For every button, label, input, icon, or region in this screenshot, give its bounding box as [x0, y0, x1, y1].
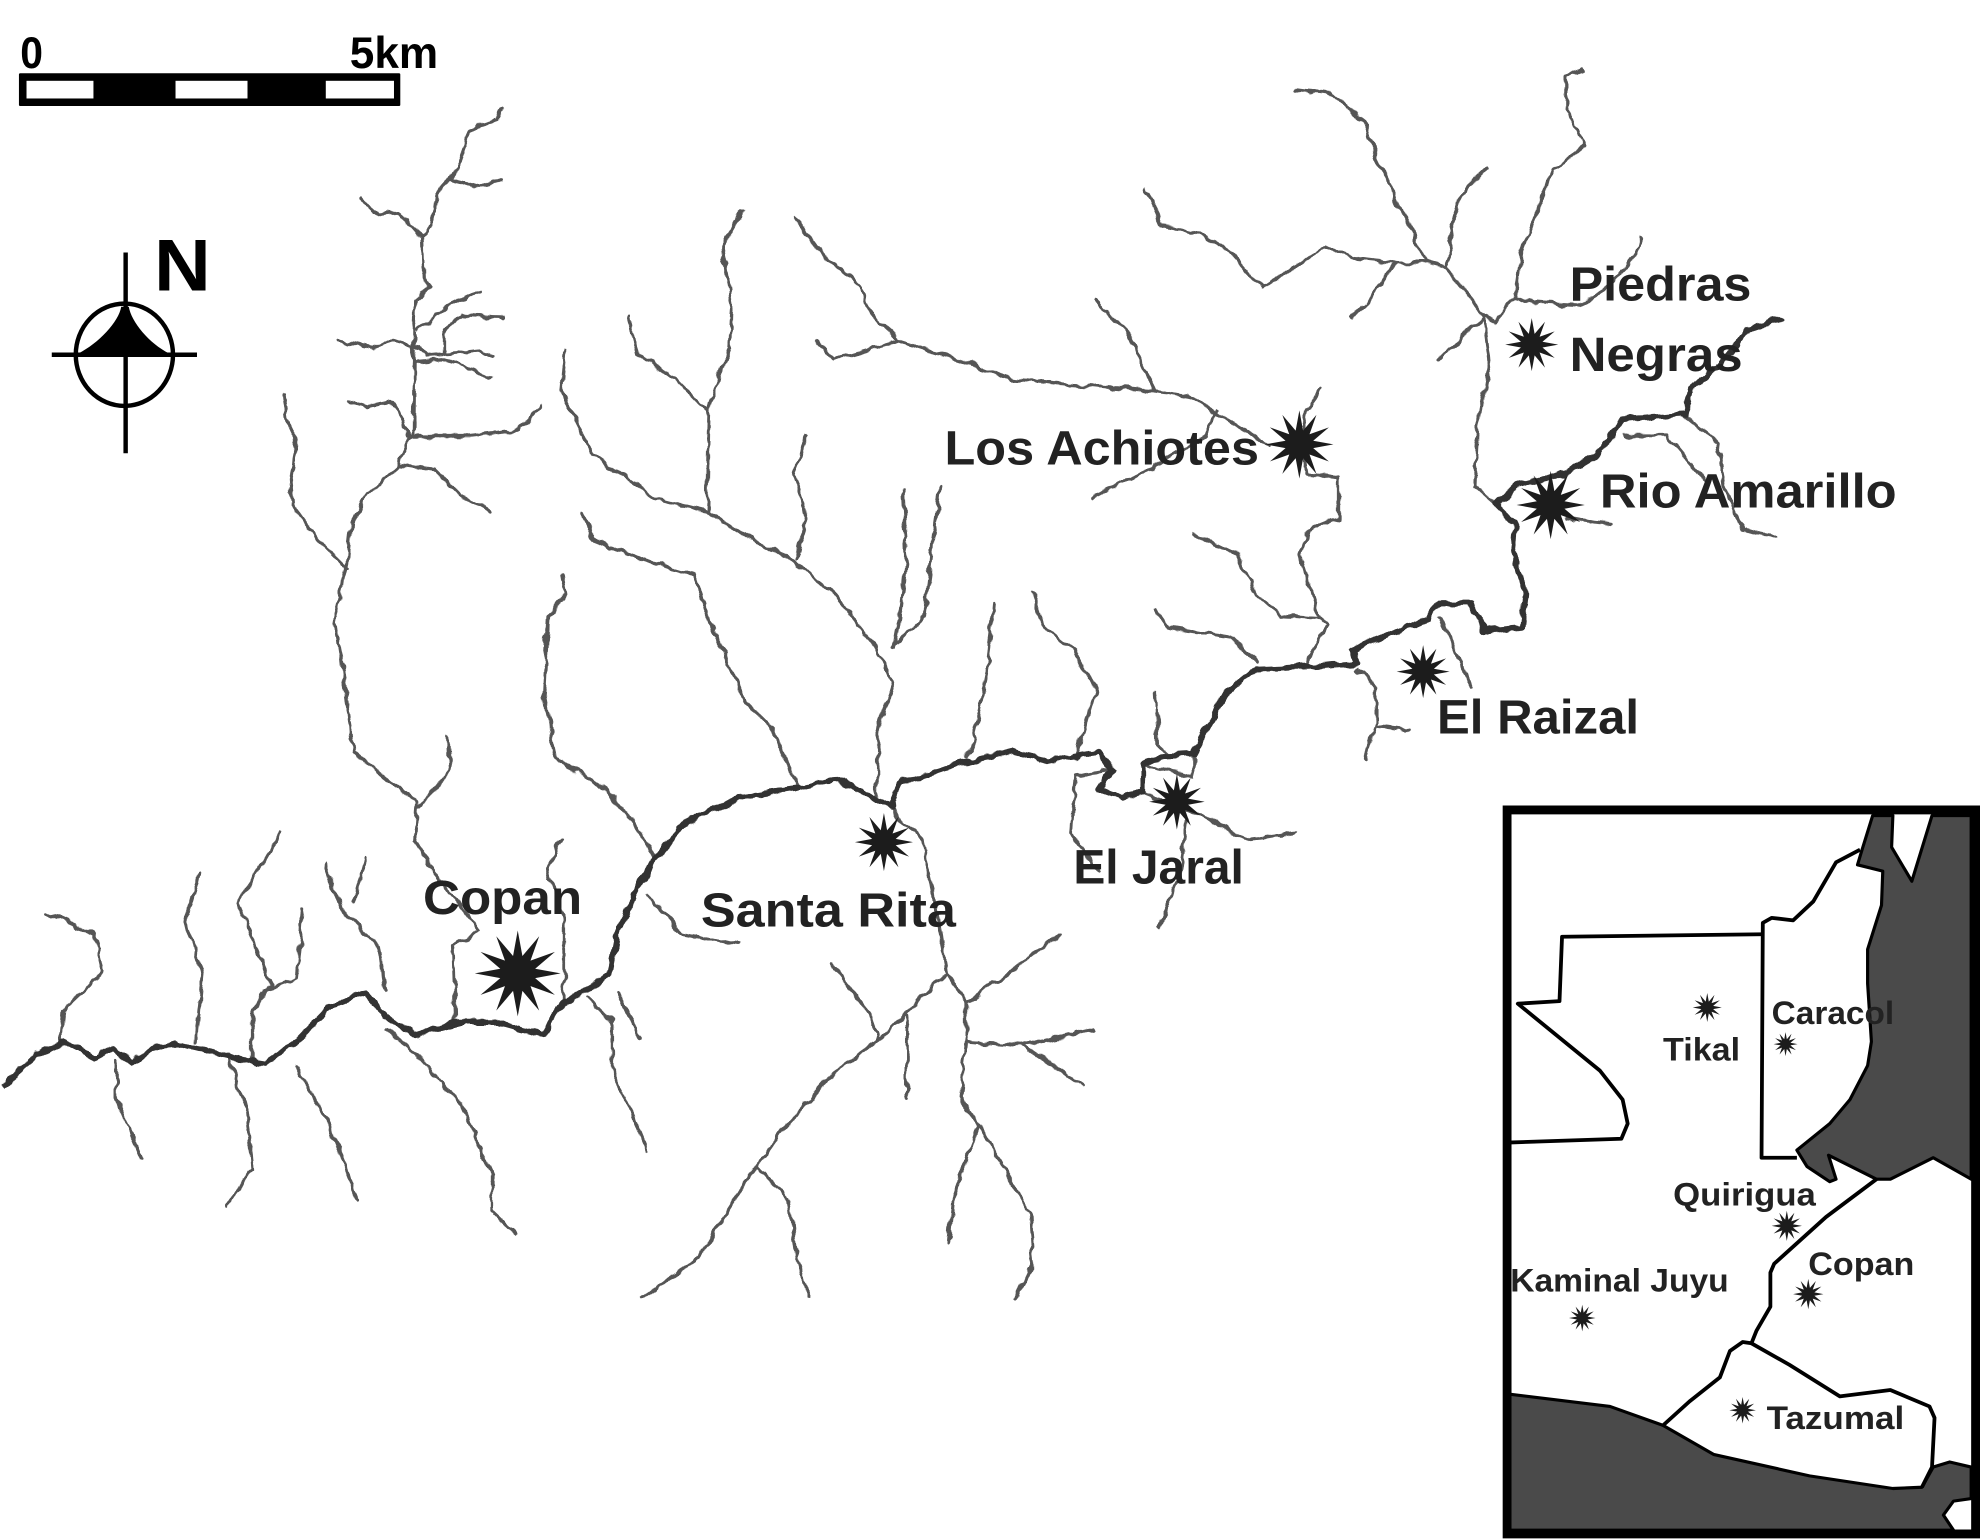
sea: Pacific: [1506, 1394, 1971, 1530]
site: Copan: Copan: [423, 872, 582, 925]
site: Rio Amarillo: Rio Amarillo: [1600, 466, 1897, 519]
inset frame: [1507, 810, 1976, 1534]
north arrow: [52, 224, 211, 453]
site: El Jaral: El Jaral: [1073, 842, 1244, 895]
inset site: Copan: [1793, 1245, 1914, 1309]
site: Piedras Negras: Piedras: [1570, 258, 1751, 311]
site: El Jaral: [1073, 774, 1244, 895]
scale bar: 5km: [350, 29, 438, 78]
site: El Raizal: El Raizal: [1437, 692, 1639, 745]
site: El Raizal: [1397, 645, 1639, 745]
scale bar: [19, 29, 438, 106]
site: Los Achiotes: Los Achiotes: [945, 423, 1259, 476]
inset site: Tikal: Tikal: [1663, 1031, 1740, 1068]
inset site: Tazumal: [1729, 1397, 1904, 1436]
sea: Caribbean: [1797, 816, 1971, 1182]
site: Piedras Negras: Negras: [1570, 329, 1743, 382]
site: Santa Rita: [701, 813, 956, 938]
site: Piedras Negras: [1505, 258, 1751, 382]
inset site: Caracol: Caracol: [1772, 994, 1894, 1031]
inset site: Kaminal Juyu: Kaminal Juyu: [1510, 1262, 1729, 1299]
site: Copan: [423, 872, 582, 1016]
inset site: Kaminal Juyu: [1510, 1262, 1729, 1331]
inset map: [1506, 810, 1976, 1534]
scale bar: 0: [20, 29, 43, 78]
inset site: Quirigua: [1673, 1176, 1817, 1241]
site: Santa Rita: Santa Rita: [701, 885, 956, 938]
inset site: Caracol: [1772, 994, 1894, 1056]
inset site: Tikal: [1663, 993, 1740, 1068]
main river: [3, 319, 1780, 1088]
site: Los Achiotes: [945, 410, 1333, 478]
inset site: Tazumal: Tazumal: [1767, 1399, 1904, 1436]
inset site: Copan: Copan: [1808, 1245, 1914, 1282]
country borders: [1508, 850, 1935, 1487]
tributary streams: [47, 69, 1774, 1298]
north arrow: N: [154, 224, 211, 306]
inset site: Quirigua: Quirigua: [1673, 1176, 1817, 1213]
site: Rio Amarillo: [1517, 466, 1897, 539]
